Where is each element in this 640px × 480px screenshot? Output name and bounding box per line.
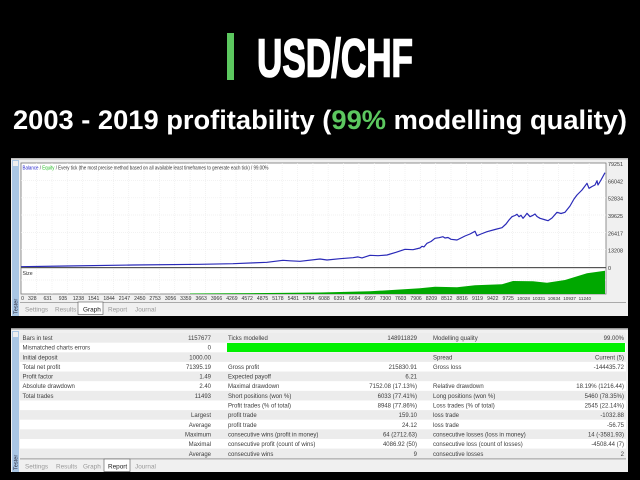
report values column 4: 148911829 xyxy=(387,336,418,342)
y axis labels: 26417 xyxy=(608,232,623,238)
report labels column 3: consecutive profit (count of wins) xyxy=(228,442,315,448)
report labels column 3 xyxy=(228,336,318,458)
subtitle: 2003 - 2019 profitability ( 99% modelling quality) xyxy=(13,105,627,135)
x axis labels: 1844 xyxy=(103,296,115,302)
title: USD/CHF xyxy=(257,28,413,88)
x axis labels: 2753 xyxy=(149,296,161,302)
y axis labels: 66042 xyxy=(608,180,623,186)
x axis labels: 328 xyxy=(28,296,37,302)
report values column 6: Current (5) xyxy=(595,355,624,361)
title accent bar xyxy=(227,33,234,80)
sidebar: tester graph tab xyxy=(12,160,20,316)
panel: strategy tester graph xyxy=(11,158,628,316)
report labels column 5: consecutive losses xyxy=(433,452,483,458)
report values column 4: 7152.08 (17.13%) xyxy=(369,384,417,390)
report values column 6: 14 (-3581.93) xyxy=(588,432,624,438)
x axis labels: 6391 xyxy=(334,296,345,302)
x axis labels: 10331 xyxy=(533,296,546,301)
report values column 2 xyxy=(185,336,212,458)
balance line xyxy=(21,173,605,267)
x axis labels: 8512 xyxy=(441,296,453,302)
report labels column 3: consecutive wins xyxy=(228,452,273,458)
x axis labels: 2450 xyxy=(134,296,146,302)
tab bar: report: Settings xyxy=(25,464,48,470)
report values column 4: 4086.92 (50) xyxy=(383,442,417,448)
report labels column 1: Total trades xyxy=(22,394,54,400)
report values column 2: Average xyxy=(189,452,212,458)
x axis labels: 10937 xyxy=(563,296,576,301)
report labels column 3: Gross profit xyxy=(228,365,259,371)
x axis labels: 3359 xyxy=(180,296,192,302)
sidebar: tester report tab: Tester xyxy=(14,455,20,470)
tab bar: graph: Settings xyxy=(25,306,48,314)
x axis labels: 10634 xyxy=(548,296,561,301)
panel: strategy tester report xyxy=(11,328,628,472)
tab bar: graph: Graph xyxy=(83,306,101,314)
report values column 6: -1032.88 xyxy=(600,413,625,419)
x axis labels: 9725 xyxy=(503,296,514,302)
report values column 6: -144435.72 xyxy=(594,365,625,371)
modelling quality bar xyxy=(227,343,625,352)
tab bar: report: Journal xyxy=(135,464,156,470)
report labels column 3: Ticks modelled xyxy=(228,336,268,342)
report labels column 5: Gross loss xyxy=(433,365,461,371)
report labels column 3: Expected payoff xyxy=(228,375,271,381)
report values column 4: 8948 (77.86%) xyxy=(378,404,417,410)
chart: balance plot xyxy=(21,163,606,294)
x axis labels: 11240 xyxy=(579,296,592,301)
x axis labels: 5178 xyxy=(272,296,284,302)
sidebar: tester graph tab: Tester xyxy=(14,299,20,314)
report labels column 1 xyxy=(22,336,90,400)
y axis labels: 39625 xyxy=(608,214,623,220)
report values column 4: 24.12 xyxy=(402,423,418,429)
size label: Size xyxy=(22,271,33,277)
report values column 6: 18.19% (1216.44) xyxy=(576,384,624,390)
report values column 2: 11493 xyxy=(195,394,212,400)
report values column 6: 2545 (22.14%) xyxy=(585,404,624,410)
y axis labels: 0 xyxy=(608,266,611,272)
tab bar: report: Graph xyxy=(83,464,101,470)
report labels column 5: consecutive losses (loss in money) xyxy=(433,432,526,438)
report labels column 5: loss trade xyxy=(433,423,460,429)
chart legend: Balance / Equity / Every tick (the most precise method based on all available least timeframes to generate each tick) / 99.00% xyxy=(22,166,269,172)
report labels column 3: profit trade xyxy=(228,413,257,419)
report values column 2: 1000.00 xyxy=(189,355,212,361)
tab bar: report xyxy=(20,458,626,472)
report values column 2: 1.49 xyxy=(199,375,212,381)
report values column 6: 2 xyxy=(621,452,625,458)
report values column 2: 2.40 xyxy=(199,384,212,390)
report values column 2: Maximum xyxy=(185,432,211,438)
x axis labels: 2147 xyxy=(119,296,130,302)
x axis labels: 1238 xyxy=(73,296,84,302)
report values column 6 xyxy=(576,336,625,458)
report values column 2: Maximal xyxy=(189,442,211,448)
x axis labels: 5784 xyxy=(303,296,314,302)
tab bar: report: Report xyxy=(108,464,127,470)
tab bar: graph xyxy=(20,302,626,314)
report labels column 3: Profit trades (% of total) xyxy=(228,404,291,410)
report labels column 5: Spread xyxy=(433,355,452,361)
x axis labels: 4269 xyxy=(226,296,238,302)
report labels column 5: Modelling quality xyxy=(433,336,478,342)
report labels column 3: consecutive wins (profit in money) xyxy=(228,432,318,438)
report values column 6: 5460 (78.35%) xyxy=(585,394,624,400)
report labels column 5 xyxy=(433,336,526,458)
report labels column 1: Absolute drawdown xyxy=(22,384,75,390)
report labels column 5: consecutive loss (count of losses) xyxy=(433,442,523,448)
x axis labels: 631 xyxy=(43,296,52,302)
x axis labels: 10028 xyxy=(517,296,530,301)
x axis labels: 7603 xyxy=(395,296,407,302)
x axis labels: 7906 xyxy=(410,296,422,302)
report values column 2: 71395.19 xyxy=(186,365,212,371)
report labels column 5: loss trade xyxy=(433,413,460,419)
x axis labels: 6694 xyxy=(349,296,361,302)
report values column 2: 1157677 xyxy=(188,336,212,342)
x axis labels: 935 xyxy=(59,296,67,302)
report values column 6: -56.75 xyxy=(607,423,625,429)
y axis labels: 52834 xyxy=(608,196,623,202)
tab bar: report: Results xyxy=(56,464,77,470)
divider between balance and size xyxy=(21,267,606,268)
x axis labels: 7300 xyxy=(380,296,391,302)
report values column 6: -4508.44 (7) xyxy=(591,442,624,448)
x axis labels: 1541 xyxy=(88,296,100,302)
report values column 2: 0 xyxy=(208,346,212,352)
y axis labels: 13208 xyxy=(608,248,623,254)
tab bar: graph: Report xyxy=(108,306,127,314)
x axis labels: 9422 xyxy=(487,296,499,302)
x axis labels: 4572 xyxy=(242,296,253,302)
x axis labels: 6997 xyxy=(364,296,376,302)
tab bar: graph: Results xyxy=(55,306,76,314)
report values column 4: 159.10 xyxy=(399,413,418,419)
report values column 4: 215830.91 xyxy=(389,365,418,371)
report labels column 3: Maximal drawdown xyxy=(228,384,279,390)
report labels column 1: Mismatched charts errors xyxy=(22,346,90,352)
report labels column 3: Short positions (won %) xyxy=(228,394,291,400)
report values column 4: 64 (2712.63) xyxy=(383,432,417,438)
x axis labels: 9119 xyxy=(472,296,483,302)
x axis labels xyxy=(21,296,592,302)
report labels column 1: Profit factor xyxy=(22,375,53,381)
report values column 4: 6033 (77.41%) xyxy=(378,394,417,400)
report labels column 1: Initial deposit xyxy=(22,355,58,361)
x axis labels: 5481 xyxy=(288,296,299,302)
x axis labels: 8209 xyxy=(426,296,437,302)
y axis labels: 79251 xyxy=(608,162,623,168)
tab bar: graph: Journal xyxy=(135,306,156,314)
y axis labels xyxy=(608,162,623,272)
x axis labels: 6088 xyxy=(318,296,330,302)
x axis labels: 3056 xyxy=(165,296,176,302)
report labels column 3: profit trade xyxy=(228,423,257,429)
x axis labels: 0 xyxy=(21,296,24,302)
report values column 4 xyxy=(369,336,418,458)
sidebar: tester report tab xyxy=(12,331,20,472)
size area chart xyxy=(190,271,605,294)
report values column 4: 9 xyxy=(414,452,418,458)
report labels column 5: Long positions (won %) xyxy=(433,394,495,400)
x axis labels: 3966 xyxy=(211,296,222,302)
x axis labels: 3663 xyxy=(196,296,207,302)
report values column 2: Largest xyxy=(191,413,211,419)
report values column 4: 6.21 xyxy=(405,375,418,381)
report values column 2: Average xyxy=(189,423,212,429)
report labels column 5: Loss trades (% of total) xyxy=(433,404,495,410)
x axis labels: 4875 xyxy=(257,296,268,302)
report labels column 1: Bars in test xyxy=(22,336,53,342)
report values column 6: 99.00% xyxy=(604,336,625,342)
report labels column 1: Total net profit xyxy=(22,365,61,371)
x axis labels: 8816 xyxy=(456,296,468,302)
report labels column 5: Relative drawdown xyxy=(433,384,484,390)
report row backgrounds xyxy=(20,333,626,458)
